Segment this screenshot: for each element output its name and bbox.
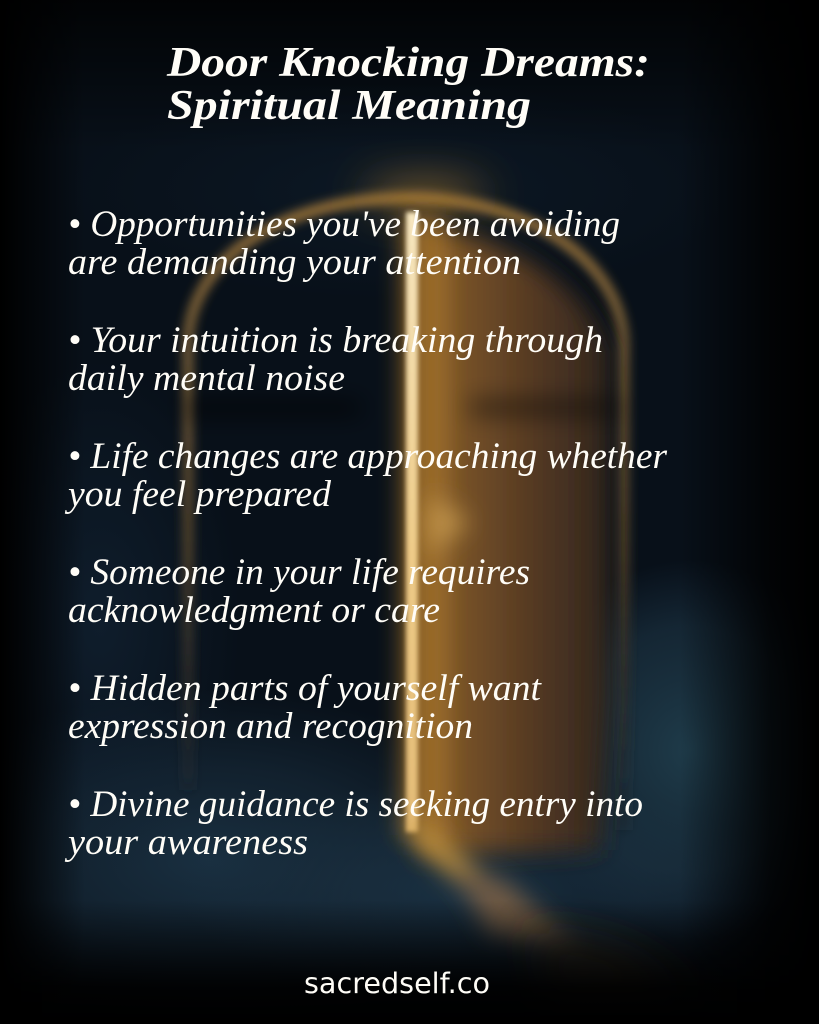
bullet 6: • Divine guidance is seeking entry into [68, 784, 643, 825]
glow around slit [402, 215, 470, 835]
bullet 5: • Hidden parts of yourself want [68, 668, 543, 709]
door frame arch [188, 198, 624, 830]
light on floor [402, 825, 580, 950]
bullet 2 [68, 320, 603, 399]
dark door band [185, 402, 620, 413]
faint floor beam [530, 930, 700, 1000]
bullet 2: • Your intuition is breaking through [68, 320, 603, 361]
bullet 5: expression and recognition [68, 706, 473, 747]
bullet 3 [64, 436, 668, 515]
bullet 4: acknowledgment or care [68, 590, 440, 631]
open door panel [420, 226, 610, 855]
title: Spiritual Meaning [167, 83, 531, 129]
bullet 6 [64, 784, 643, 863]
bullet 5 [68, 668, 543, 747]
bullet 1: are demanding your attention [68, 242, 521, 283]
bullet 6: your awareness [64, 822, 308, 863]
bullet 4 [68, 552, 530, 631]
bullet 1 [68, 204, 620, 283]
bullet 1: • Opportunities you've been avoiding [68, 204, 620, 245]
bullet 4: • Someone in your life requires [68, 552, 530, 593]
bullet 2: daily mental noise [68, 358, 345, 399]
bullet 3: you feel prepared [64, 474, 331, 515]
bright slit of light [406, 212, 418, 832]
glow at arch top [365, 185, 485, 205]
bullet 3: • Life changes are approaching whether [68, 436, 668, 477]
title: Door Knocking Dreams: [166, 40, 650, 86]
footer website: sacredself.co [304, 966, 490, 1000]
title [166, 40, 650, 129]
